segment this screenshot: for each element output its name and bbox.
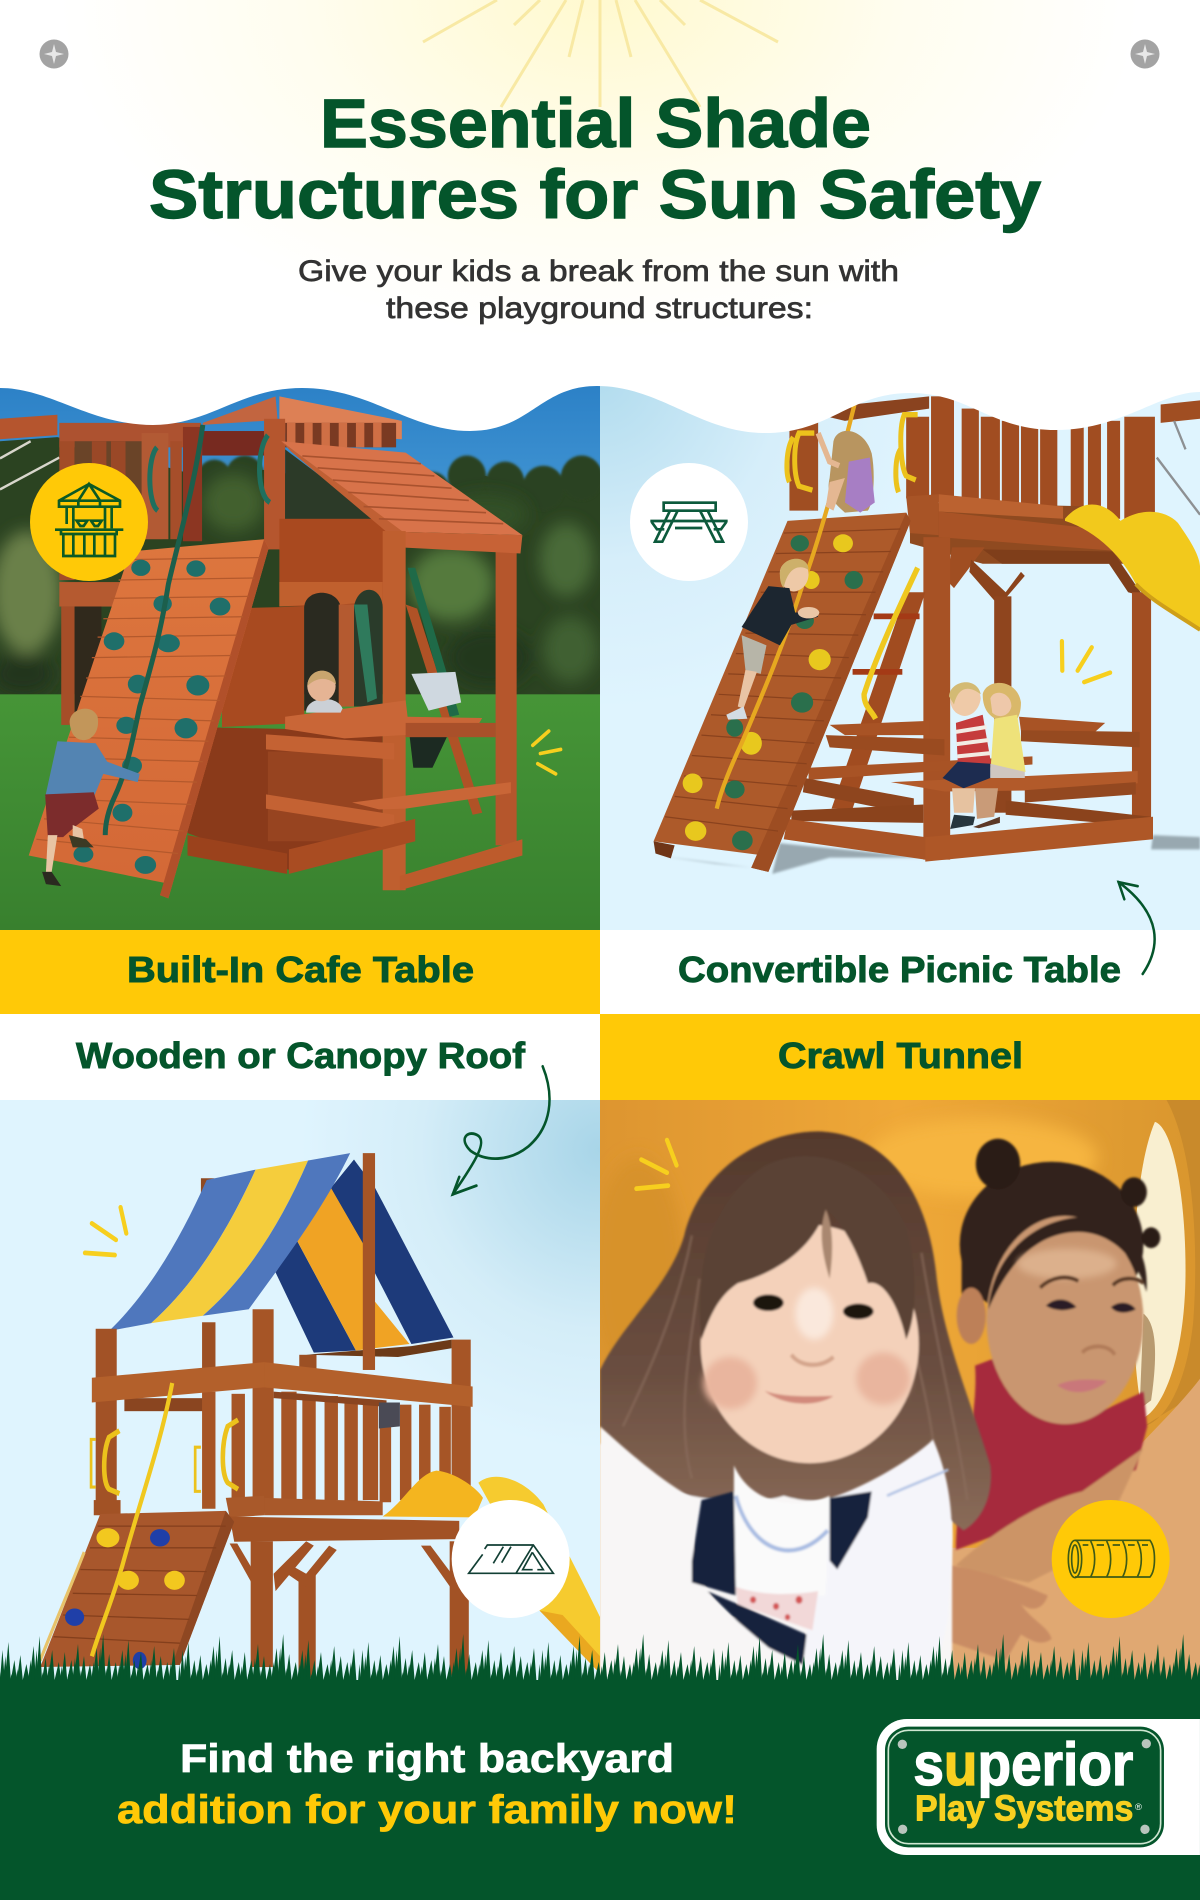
subtitle: Give your kids a break from the sun with xyxy=(298,255,899,288)
white shirt and straps xyxy=(600,1426,952,1690)
wavy white header edge xyxy=(0,0,1200,433)
ladder and bar xyxy=(832,568,925,809)
label band: wooden or canopy roof: Wooden or Canopy Roof xyxy=(76,1035,526,1076)
icon: right sparkle button xyxy=(1130,40,1160,68)
child climbing xyxy=(42,709,140,886)
label band: convertible picnic table xyxy=(600,930,1200,1014)
yellow handles xyxy=(91,1420,238,1494)
swing chain xyxy=(1157,421,1200,515)
icon: crawl tunnel xyxy=(1052,1500,1170,1618)
yellow slide xyxy=(383,1471,600,1674)
call to action text: addition for your family now! xyxy=(117,1788,737,1832)
footer band xyxy=(0,1680,1200,1900)
sparkle: crawl tunnel xyxy=(636,1140,677,1189)
logo: superior play systems: ® xyxy=(1135,1802,1142,1812)
tunnel interior xyxy=(592,1100,1200,1690)
panel: crawl tunnel photo xyxy=(592,1100,1200,1690)
deck beams and posts xyxy=(906,494,1151,860)
panel: wooden or canopy roof photo xyxy=(0,1100,600,1690)
support legs xyxy=(230,1541,469,1678)
label band: wooden or canopy roof xyxy=(0,1014,600,1100)
lawn xyxy=(0,694,600,931)
front post and cafe tables xyxy=(188,531,522,890)
structure: back deck and beam xyxy=(0,396,277,725)
climbing wall xyxy=(29,425,270,898)
label band: convertible picnic table: Convertible Picnic Table xyxy=(678,949,1121,990)
subtitle xyxy=(298,255,899,325)
canopy back xyxy=(201,1160,453,1353)
panel: convertible picnic table photo xyxy=(600,380,1200,930)
ground shadows xyxy=(657,835,1200,874)
sparkle: canopy roof xyxy=(85,1207,126,1255)
title: Structures for Sun Safety xyxy=(149,156,1041,233)
picnic benches and floor xyxy=(784,717,1153,862)
girl with long hair xyxy=(600,1131,991,1690)
girl on deck xyxy=(818,431,875,513)
upper railing xyxy=(789,396,1200,523)
swing leg and person behind xyxy=(406,551,517,845)
label band: built-in cafe table: Built-In Cafe Table xyxy=(127,949,474,990)
yellow grab handles xyxy=(787,415,918,492)
call to action text: Find the right backyard xyxy=(180,1737,674,1781)
header sun glow xyxy=(60,0,1140,340)
child in window xyxy=(306,671,343,713)
label band: crawl tunnel: Crawl Tunnel xyxy=(778,1035,1023,1076)
title: Essential Shade xyxy=(320,85,871,162)
climbing wall xyxy=(654,404,911,872)
icon: left sparkle button xyxy=(40,40,68,68)
boy climbing xyxy=(726,559,819,720)
roof xyxy=(281,441,522,553)
swing ropes xyxy=(0,441,59,489)
panel: built-in cafe table photo xyxy=(0,380,603,931)
ramp wall xyxy=(40,1383,234,1669)
back lower posts and beam xyxy=(96,1153,471,1513)
label band: crawl tunnel xyxy=(600,1014,1200,1100)
icon: cafe gazebo xyxy=(30,463,148,581)
tower xyxy=(188,396,402,870)
trees xyxy=(0,437,603,702)
title xyxy=(149,85,1041,233)
deck beams xyxy=(92,1362,473,1542)
arrow: picnic table xyxy=(1119,882,1155,974)
sky xyxy=(0,386,600,485)
icon: canopy roof xyxy=(452,1500,570,1618)
canopy front stripes xyxy=(109,1153,350,1331)
grass edge xyxy=(0,1634,1200,1698)
arrow: canopy roof xyxy=(453,1066,550,1194)
call to action text xyxy=(117,1737,737,1832)
slide xyxy=(1065,504,1200,630)
sparkle: picnic table xyxy=(1062,641,1110,682)
subtitle: these playground structures: xyxy=(386,292,813,325)
label band: built-in cafe table xyxy=(0,930,600,1014)
icon: picnic table xyxy=(630,463,748,581)
sun rays xyxy=(423,0,778,107)
girl in red shirt xyxy=(941,1139,1160,1661)
logo: superior play systems xyxy=(877,1719,1200,1855)
logo: superior play systems: superior xyxy=(913,1731,1133,1798)
logo: superior play systems: Play Systems xyxy=(915,1788,1133,1829)
children at table xyxy=(943,682,1026,829)
sparkle: cafe table xyxy=(533,731,561,774)
railing slats xyxy=(124,1392,451,1511)
